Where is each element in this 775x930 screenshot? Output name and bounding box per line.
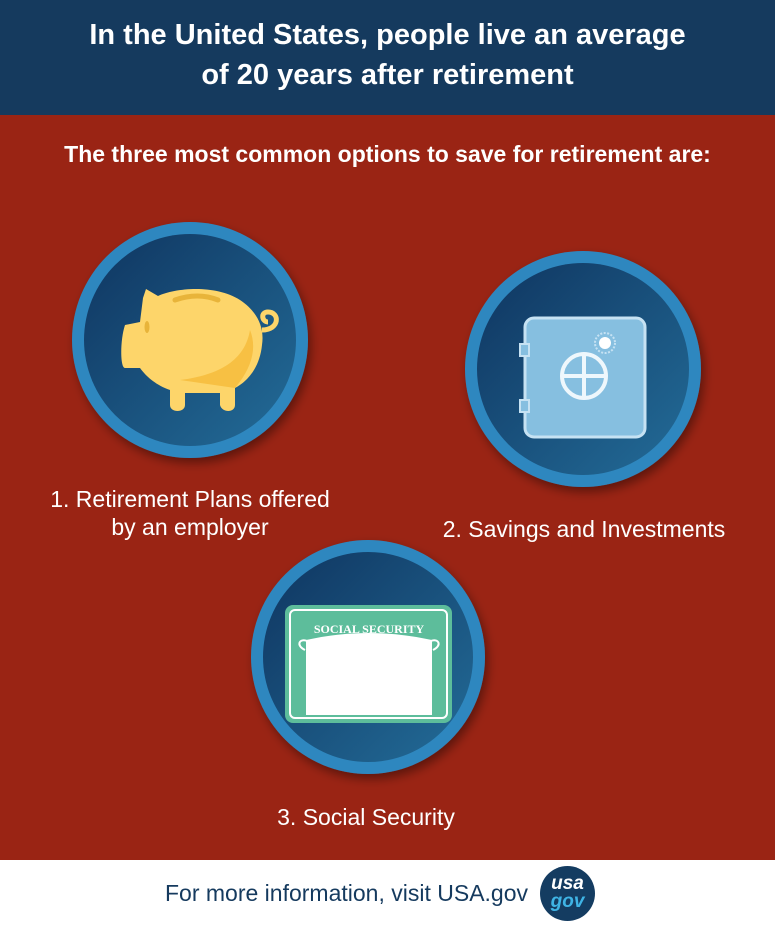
icon: social security card circle [251,540,485,774]
footer [0,860,775,930]
icon: piggy bank circle [72,222,308,458]
icon: safe circle [465,251,701,487]
title [0,0,775,115]
label 2: 2. Savings and Investments [443,516,725,542]
subheading: The three most common options to save for retirement are: [64,141,711,167]
icon: usa gov logo: gov [551,891,584,912]
label 3: 3. Social Security [277,804,455,830]
footer text: For more information, visit USA.gov [165,880,528,906]
title: In the United States, people live an average [89,19,686,51]
icon: usa gov logo [540,866,595,921]
icon: social security card circle: SOCIAL SECURITY [314,622,425,636]
label 1: 1. Retirement Plans offered [50,486,330,512]
label 1: by an employer [111,514,269,540]
icon: usa gov logo: usa [551,873,584,894]
label 1 [50,486,330,540]
title: of 20 years after retirement [201,59,574,91]
